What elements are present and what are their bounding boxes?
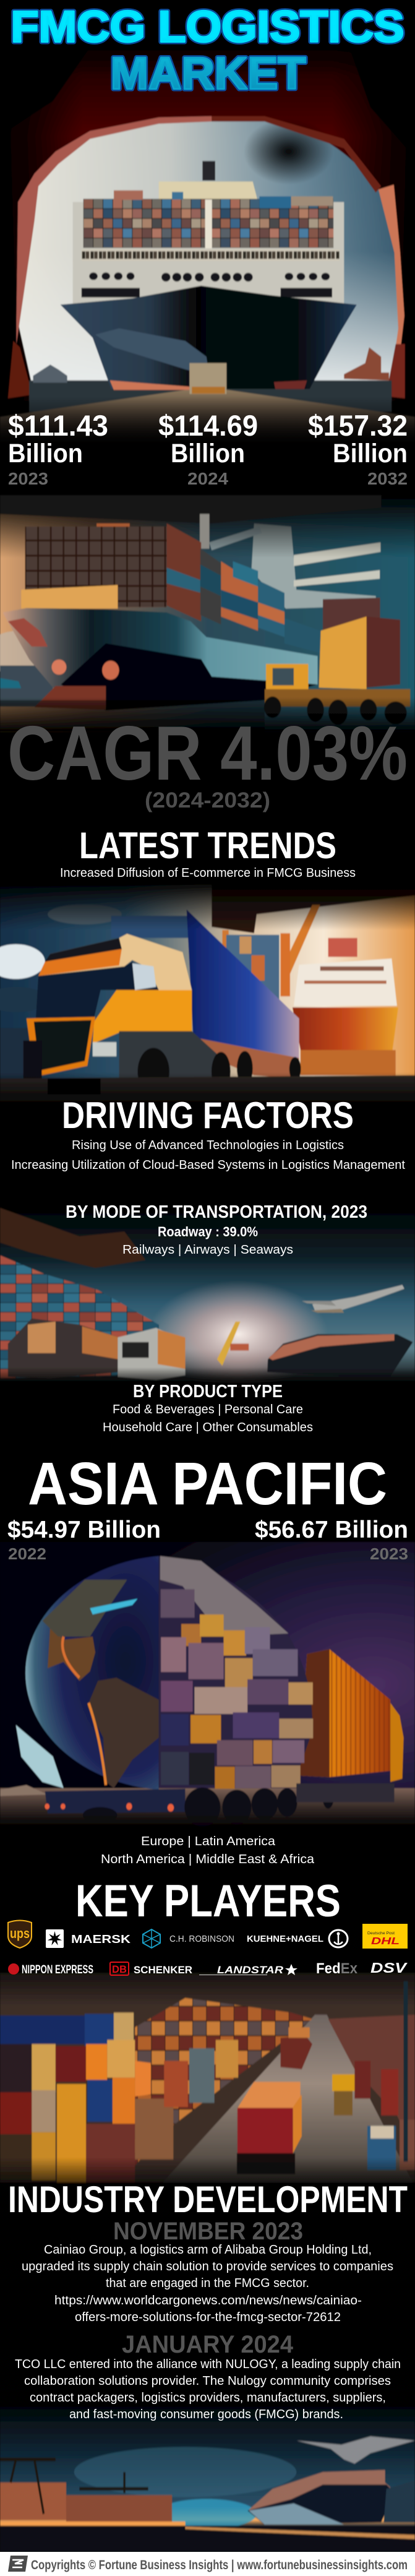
title: [11, 2, 404, 99]
November 2023 development: NOVEMBER 2023: [113, 2218, 303, 2245]
November 2023 development: [22, 2218, 393, 2324]
logo: DB Schenker: DB: [112, 1963, 127, 1975]
November 2023 development: that are engaged in the FMCG sector.: [106, 2277, 309, 2290]
stat: Asia Pacific 2023: $56.67 Billion: [255, 1517, 408, 1543]
other regions list: North America | Middle East & Africa: [101, 1853, 315, 1866]
stat: Asia Pacific 2022: $54.97 Billion: [7, 1517, 161, 1543]
other regions list: Europe | Latin America: [141, 1835, 276, 1848]
stat: Asia Pacific 2022: 2022: [8, 1544, 46, 1563]
stat: 2023 market size: $111.43: [8, 409, 108, 442]
January 2024 development: JANUARY 2024: [122, 2331, 294, 2358]
logo: Kuehne+Nagel: KUEHNE+NAGEL: [247, 1934, 323, 1944]
logo: Landstar: LANDSTAR: [217, 1964, 284, 1976]
footer bar: [0, 2552, 415, 2576]
title: MARKET: [110, 48, 306, 99]
title: FMCG LOGISTICS: [11, 2, 404, 52]
November 2023 development: upgraded its supply chain solution to provide services to companies: [22, 2260, 393, 2273]
January 2024 development: [15, 2331, 401, 2421]
image: globe and boxes on truck: [0, 1542, 415, 1832]
CAGR figure: (2024-2032): [145, 788, 270, 812]
logo: Nippon Express: NIPPON EXPRESS: [22, 1963, 93, 1976]
stat: Asia Pacific 2023: [255, 1517, 408, 1563]
stat: 2032 market size: Billion: [333, 439, 408, 468]
logo: Deutsche Post DHL: DHL: [371, 1936, 400, 1947]
image: night port with ship and plane: [0, 2392, 415, 2552]
logo: FedEx: FedEx: [316, 1960, 358, 1977]
logo: Kuehne+Nagel: [247, 1930, 348, 1947]
image: container yard with trucks: [0, 1952, 415, 2195]
title: MARKET: [110, 48, 306, 99]
logo: Deutsche Post DHL: [362, 1924, 408, 1949]
logo: Nippon Express: [8, 1963, 93, 1976]
stat: 2032 market size: $157.32: [308, 409, 408, 442]
January 2024 development: collaboration solutions provider. The Nulogy community comprises: [24, 2374, 391, 2388]
November 2023 development: https://www.worldcargonews.com/news/news/cainiao-: [54, 2294, 362, 2307]
mode of transportation heading: BY MODE OF TRANSPORTATION, 2023: [66, 1202, 367, 1222]
stat: 2024 market size: Billion: [171, 439, 245, 468]
icon: Fortune Business Insights logo: [8, 2556, 28, 2572]
logo: UPS: ups: [10, 1926, 30, 1941]
Asia Pacific heading: ASIA PACIFIC: [28, 1450, 387, 1517]
other regions list: [101, 1835, 315, 1866]
logo: Landstar: [199, 1964, 297, 1976]
stat: Asia Pacific 2022: [7, 1517, 161, 1563]
stat: 2024 market size: $114.69: [158, 409, 258, 442]
stat: 2023 market size: [8, 409, 108, 488]
image: container ship and port truck: [0, 495, 415, 732]
key players heading: KEY PLAYERS: [75, 1876, 341, 1926]
November 2023 development: offers-more-solutions-for-the-fmcg-sector-72612: [75, 2311, 341, 2324]
January 2024 development: contract packagers, logistics providers, manufacturers, suppliers,: [30, 2391, 386, 2405]
product type list: Household Care | Other Consumables: [103, 1421, 313, 1434]
latest trends text: Increased Diffusion of E-commerce in FMCG Business: [60, 866, 356, 880]
stat: 2032 market size: 2032: [367, 469, 408, 488]
logo: C.H. Robinson: [143, 1929, 234, 1948]
product type list: [103, 1403, 313, 1434]
logo: Deutsche Post DHL: Deutsche Post: [367, 1932, 395, 1936]
logo: Maersk: [46, 1929, 130, 1948]
November 2023 development: Cainiao Group, a logistics arm of Alibaba Group Holding Ltd,: [44, 2243, 372, 2257]
driving factors text: [11, 1139, 405, 1172]
January 2024 development: TCO LLC entered into the alliance with NULOGY, a leading supply chain: [15, 2358, 401, 2371]
product type list: Food & Beverages | Personal Care: [113, 1403, 303, 1416]
stat: 2023 market size: 2023: [8, 469, 48, 488]
logo: DSV: DSV: [370, 1960, 408, 1976]
stat: 2023 market size: Billion: [8, 439, 83, 468]
logo: C.H. Robinson: C.H. ROBINSON: [169, 1934, 234, 1944]
hero image: container ship seen through red hull arch: [0, 41, 415, 445]
product type heading: BY PRODUCT TYPE: [133, 1382, 283, 1402]
latest trends heading: LATEST TRENDS: [79, 825, 336, 866]
title: FMCG LOGISTICS: [11, 2, 404, 52]
image: truck and cargo ship at port: [0, 883, 415, 1107]
driving factors text: Rising Use of Advanced Technologies in Logistics: [72, 1139, 344, 1152]
transport modes list: Railways | Airways | Seaways: [122, 1243, 293, 1257]
stat: 2032 market size: [308, 409, 408, 488]
driving factors heading: DRIVING FACTORS: [62, 1095, 354, 1136]
roadway share: Roadway : 39.0%: [158, 1224, 258, 1239]
logo: Maersk: MAERSK: [71, 1933, 130, 1945]
logo: DB Schenker: [110, 1962, 192, 1976]
stat: 2024 market size: [158, 409, 258, 488]
stat: 2024 market size: 2024: [187, 469, 228, 488]
logo: DB Schenker: SCHENKER: [134, 1964, 192, 1976]
January 2024 development: and fast-moving consumer goods (FMCG) brands.: [69, 2408, 343, 2421]
logo: UPS: [8, 1921, 32, 1948]
driving factors text: Increasing Utilization of Cloud-Based Systems in Logistics Management: [11, 1158, 405, 1172]
fade under hero: [0, 396, 415, 452]
image: rail, road, air and sea transport: [0, 1205, 415, 1388]
stat: Asia Pacific 2023: 2023: [370, 1544, 408, 1563]
